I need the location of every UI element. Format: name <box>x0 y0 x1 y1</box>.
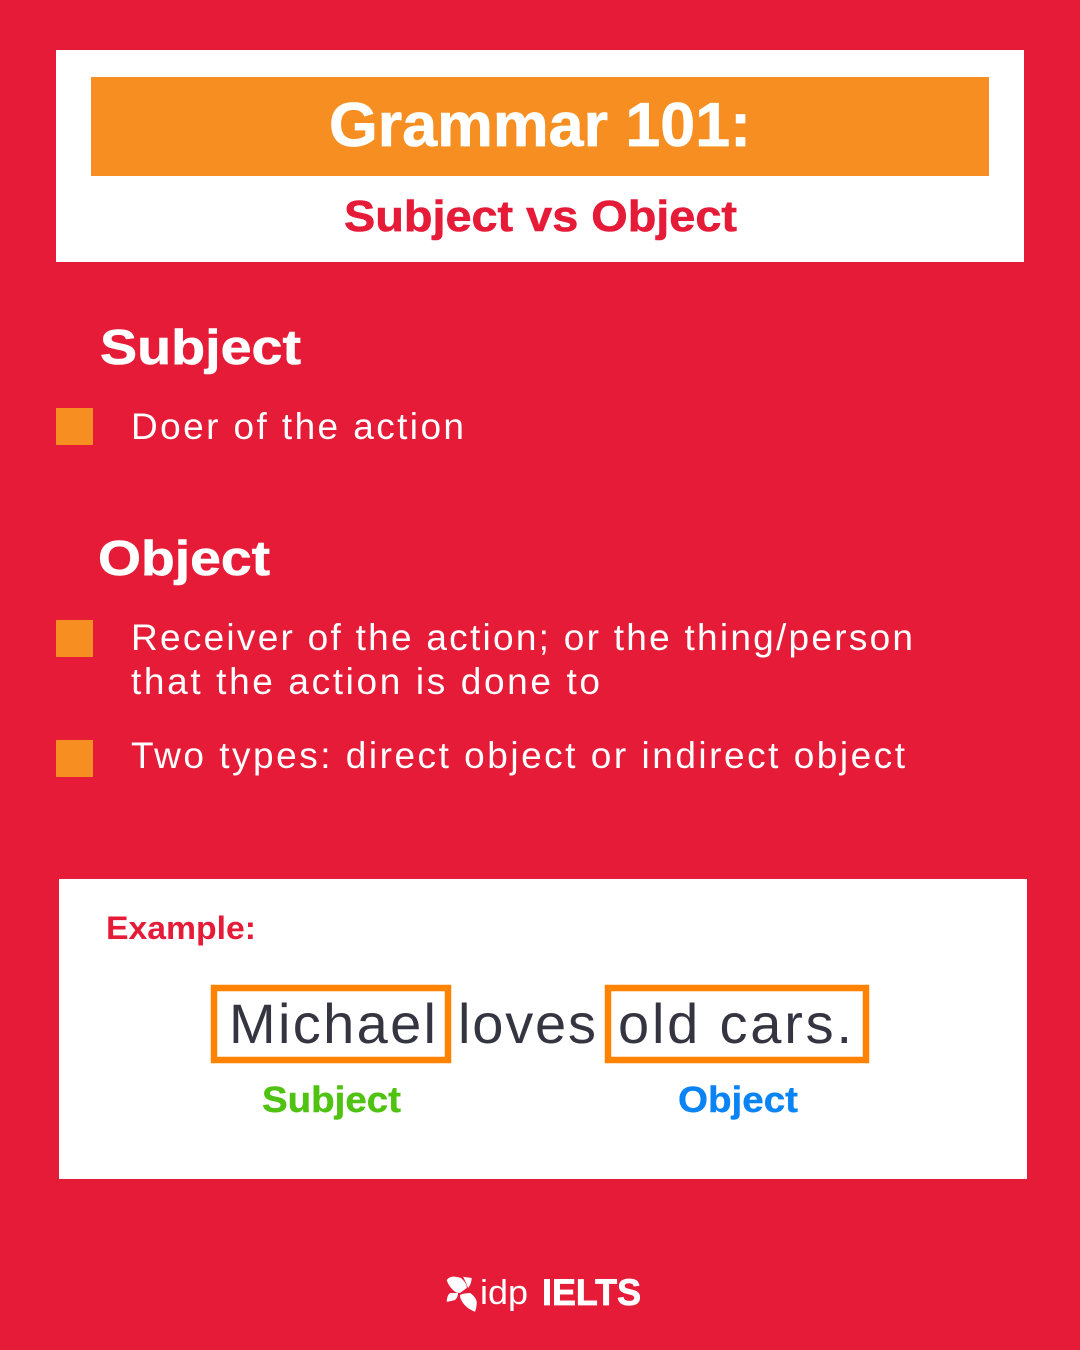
icon: idp leaf mark <box>447 1277 477 1312</box>
logo wordmark: idp: idp <box>480 1274 528 1312</box>
subtitle: Subject vs Object <box>344 192 737 241</box>
bullet: receiver of the action <box>56 617 913 702</box>
label: subject: Subject <box>262 1079 401 1120</box>
bullet: receiver of the action: Receiver of the action; or the thing/person <box>131 617 913 658</box>
heading: Subject: Subject <box>100 321 301 375</box>
label: object: Object <box>678 1079 798 1120</box>
highlight box: object words: old cars. <box>618 992 852 1055</box>
highlight box: subject word: Michael <box>229 992 436 1055</box>
bullet: doer of the action: Doer of the action <box>131 406 464 447</box>
bullet: receiver of the action: that the action is done to <box>131 661 600 702</box>
sentence verb: loves <box>458 992 596 1055</box>
panel: example <box>59 879 1027 1179</box>
heading: Object: Object <box>98 532 270 586</box>
panel: title header <box>56 50 1024 262</box>
bullet: two types: Two types: direct object or indirect object <box>131 735 906 776</box>
title banner <box>91 77 989 176</box>
title banner: Grammar 101: <box>329 91 751 160</box>
example label: Example: <box>106 910 256 946</box>
logo: idp IELTS <box>447 1272 641 1313</box>
logo wordmark: IELTS: IELTS <box>542 1272 641 1313</box>
